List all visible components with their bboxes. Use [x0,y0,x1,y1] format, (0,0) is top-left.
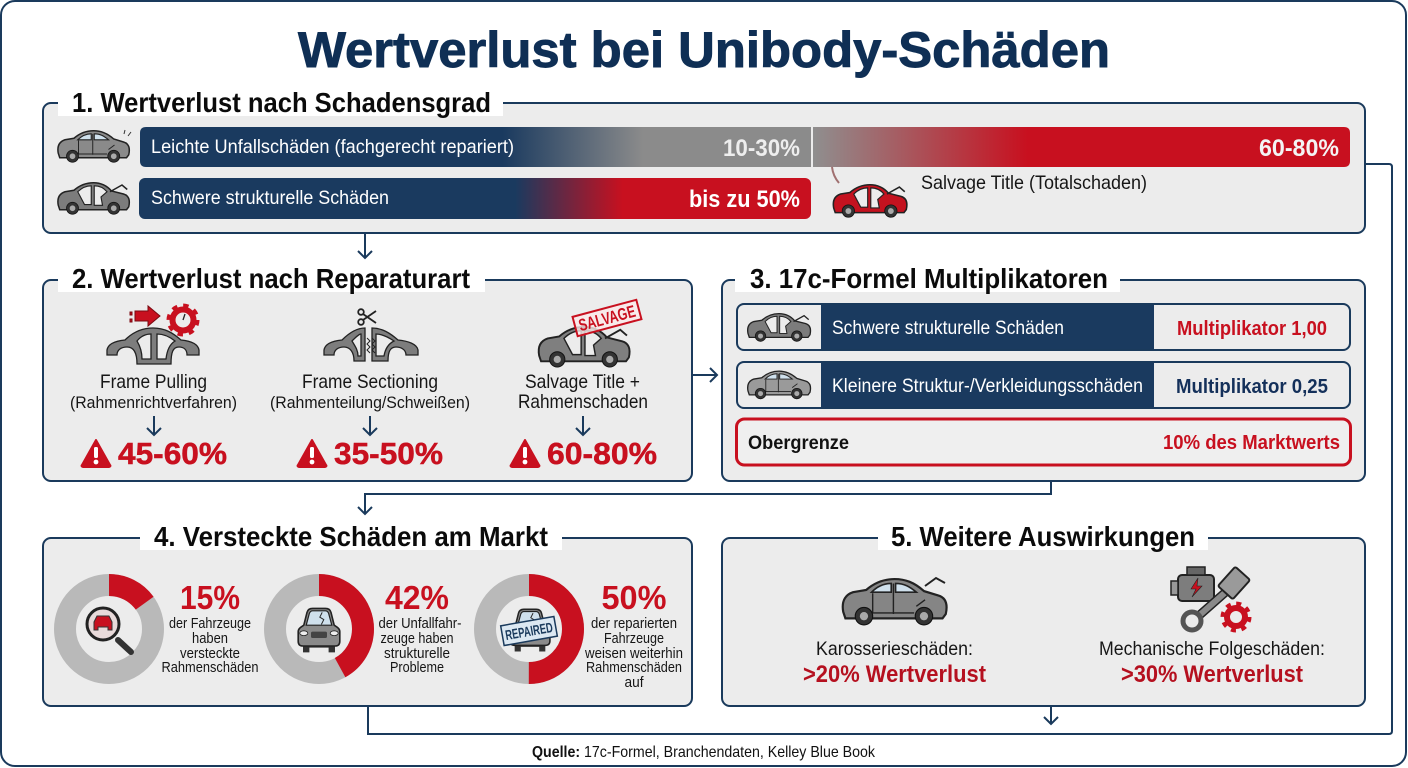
heading 4: 4. Versteckte Schäden am Markt [154,521,548,552]
row label: Kleinere Struktur-/Verkleidungsschäden [832,375,1143,397]
label: salvage title plus frame damage [518,371,648,413]
icon: salvage car with stamp [539,300,641,367]
panel: Weitere Auswirkungen [722,521,1365,706]
label: salvage title plus frame damage: Salvage Title + [525,371,640,393]
label: salvage title: Salvage Title (Totalschaden) [921,172,1147,194]
stat 15% [162,579,258,676]
bar: light damage: Leichte Unfallschäden (fachgerecht repariert) [151,136,514,158]
arrow: panel 5 downward [1044,706,1058,724]
value: 45-60%: 45-60% [118,436,227,471]
text: Karosserieschäden: Karosserieschäden: [816,638,973,660]
panel: Versteckte Schäden am Markt [43,521,692,706]
stat 15%: versteckte [180,645,240,662]
row: Obergrenze [736,419,1350,465]
heading 2: 2. Wertverlust nach Reparaturart [72,263,470,294]
bar: light damage [140,127,811,167]
arrow: down [576,416,590,435]
icon: salvage car with stamp: SALVAGE [577,302,638,335]
stat 15%: haben [192,630,228,647]
label: frame pulling: (Rahmenrichtverfahren) [70,393,237,412]
stat 42%: Probleme [390,659,444,676]
bar: salvage title [813,127,1350,167]
icon: damaged car [748,314,811,341]
icon: light car [748,371,811,399]
stat 15%: Rahmenschäden [162,659,258,676]
icon: lightly damaged car [58,130,131,162]
bar: severe structural damage [139,178,811,219]
icon: frame pulling [107,306,199,364]
stat 42%: strukturelle [384,645,450,662]
row label: Schwere strukturelle Schäden [832,317,1064,339]
column: salvage title plus frame damage [511,300,657,471]
arrow: panel 3 to panel 4 [358,481,1051,514]
stat 42% [378,579,462,676]
row: Obergrenze: 10% des Marktwerts [1163,432,1340,454]
donut 15% [65,585,153,673]
row: Obergrenze: Obergrenze [748,432,849,454]
panel: Wertverlust nach Schadensgrad [43,87,1365,233]
icon: red wrecked car [833,185,907,217]
label: frame pulling: Frame Pulling [100,371,207,393]
label: salvage title plus frame damage: Rahmenschaden [518,391,648,413]
stat 42%: der Unfallfahr- [378,615,462,632]
label: frame sectioning: Frame Sectioning [302,371,438,393]
stat 50% [584,579,683,691]
stat 15%: der Fahrzeuge [169,615,251,632]
title: Wertverlust bei Unibody-Schäden [298,22,1110,78]
stat 50%: Fahrzeuge [604,630,664,647]
icon: damaged car body [843,578,947,625]
stat 42%: 42% [385,579,449,616]
value: 60-80%: 60-80% [547,436,657,471]
donut 42% [275,585,363,673]
bar: salvage title: 60-80% [1259,135,1339,162]
stat 42%: zeuge haben [380,630,454,647]
source note: Quelle: 17c-Formel, Branchendaten, Kelley Blue Book [532,744,876,761]
stat 50%: der reparierten [591,615,677,632]
arrow: long connector from panel 1 to panel 4 [368,164,1392,734]
multiplier: Multiplikator 1,00 [1177,318,1327,340]
stat 50%: Rahmenschäden [586,659,682,676]
label: frame sectioning [270,371,470,412]
text: Mechanische Folgeschäden [1099,638,1325,688]
panel: Wertverlust nach Reparaturart [43,263,692,481]
bar: severe structural damage: bis zu 50% [689,186,800,213]
stat 15%: 15% [180,579,240,616]
icon: heavily damaged car [58,183,129,214]
row: schwere strukturelle Schäden [737,304,1350,350]
icon: magnifier on car [87,608,131,652]
value: 35-50%: 35-50% [334,436,443,471]
icon: front car with cracked windshield [298,608,340,652]
arrow: panel 1 to panel 2 [358,233,372,258]
multiplier: Multiplikator 0,25 [1176,376,1328,398]
bar: light damage: 10-30% [723,135,800,162]
row: kleinere Schäden [737,362,1350,408]
text: Mechanische Folgeschäden: Mechanische Folgeschäden: [1099,638,1325,660]
column: frame pulling [70,306,237,471]
label: frame pulling [70,371,237,412]
text: Mechanische Folgeschäden: >30% Wertverlust [1121,661,1303,688]
bar: severe structural damage: Schwere strukturelle Schäden [151,187,389,209]
stat 50%: 50% [602,579,666,616]
arrow: down [363,416,377,435]
icon: repaired car: REPAIRED [504,619,554,643]
icon: engine, piston and gear [1171,567,1250,630]
heading 5: 5. Weitere Auswirkungen [891,521,1195,552]
column: frame sectioning [270,309,470,471]
heading 1: 1. Wertverlust nach Schadensgrad [72,87,491,118]
text: Karosserieschäden: >20% Wertverlust [803,661,986,688]
arrow: down [147,416,161,435]
label: frame sectioning: (Rahmenteilung/Schweißen) [270,393,470,412]
panel: 17c-Formel Multiplikatoren [722,263,1365,481]
text: Karosserieschäden [803,638,986,688]
arrow: panel 2 to panel 3 [692,368,717,382]
stat 50%: auf [624,674,644,691]
icon: frame sectioning [324,309,418,361]
donut 50% [485,585,573,673]
heading 3: 3. 17c-Formel Multiplikatoren [750,263,1108,294]
salvage connector curve [832,167,839,183]
stat 50%: weisen weiterhin [584,645,683,662]
